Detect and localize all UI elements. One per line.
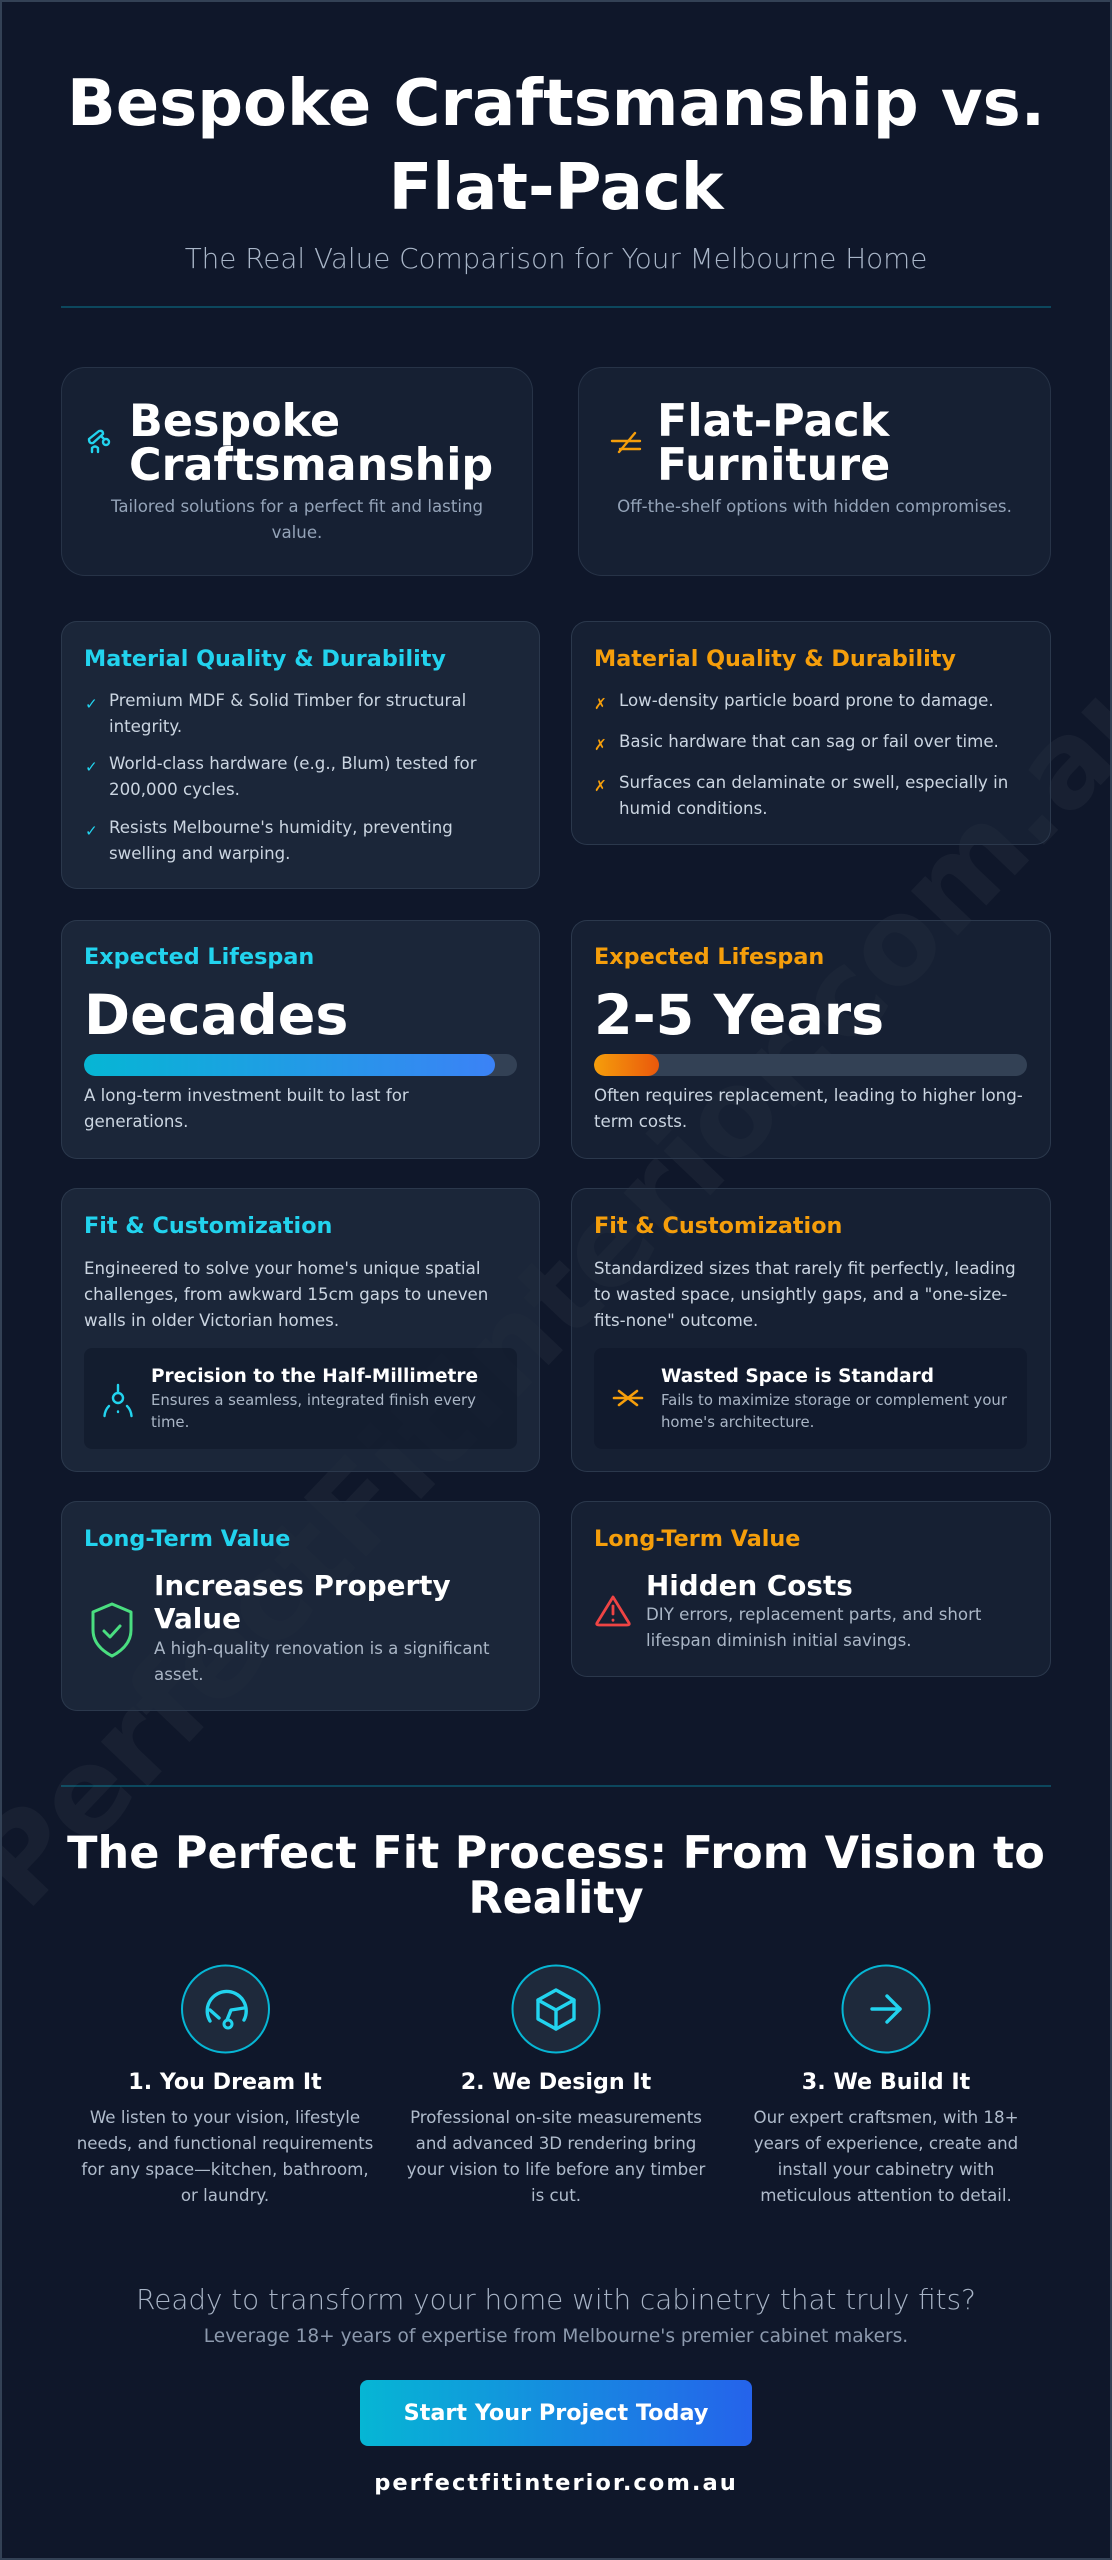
heading: Bespoke <box>129 396 340 447</box>
list item: ✓ <box>85 695 98 713</box>
list item: 200,000 cycles. <box>109 780 240 799</box>
description: Engineered to solve your home's unique spatial <box>84 1259 480 1278</box>
list item: ✓ <box>85 822 98 840</box>
value text <box>646 1605 981 1650</box>
subtitle: The Real Value Comparison for Your Melbourne Home <box>185 242 927 275</box>
heading: Expected Lifespan <box>594 944 824 970</box>
step 1 <box>77 1964 373 2205</box>
step text <box>77 2108 373 2205</box>
process heading: The Perfect Fit Process: From Vision to <box>67 1828 1045 1879</box>
heading: Long-Term Value <box>84 1526 290 1552</box>
value title: Value <box>154 1602 241 1635</box>
value text: lifespan diminish initial savings. <box>646 1631 912 1650</box>
list item: Low-density particle board prone to damage. <box>619 691 994 710</box>
panel: flat-pack material quality <box>571 621 1051 845</box>
metric: 2-5 Years <box>594 983 884 1048</box>
callout: precision <box>84 1348 517 1449</box>
description: challenges, from awkward 15cm gaps to uneven <box>84 1285 488 1304</box>
description: generations. <box>84 1112 188 1131</box>
value title: Hidden Costs <box>646 1569 853 1602</box>
step text <box>753 2108 1018 2205</box>
website: perfectfitinterior.com.au <box>374 2470 738 2496</box>
call to action heading: Ready to transform your home with cabinetry that truly fits? <box>136 2283 976 2316</box>
list item: ✗ <box>594 777 607 795</box>
title: Bespoke Craftsmanship vs. <box>67 67 1045 141</box>
panel: flat-pack long-term value <box>571 1501 1051 1677</box>
icon: not equal <box>610 432 642 454</box>
step text <box>407 2108 706 2205</box>
description: walls in older Victorian homes. <box>84 1311 339 1330</box>
panel: flat-pack header card <box>578 367 1051 576</box>
heading: Fit & Customization <box>84 1213 332 1239</box>
list item <box>85 754 477 799</box>
value text: asset. <box>154 1665 204 1684</box>
list item: Premium MDF & Solid Timber for structural <box>109 691 466 710</box>
callout text <box>151 1391 476 1431</box>
list item: humid conditions. <box>619 799 768 818</box>
list item: ✗ <box>594 736 607 754</box>
panel: bespoke material quality <box>61 621 540 889</box>
list item: Resists Melbourne's humidity, preventing <box>109 818 453 837</box>
button: Start Your Project Today <box>404 2400 708 2426</box>
call to action text: Leverage 18+ years of expertise from Melbourne's premier cabinet makers. <box>204 2326 908 2347</box>
step title: 2. We Design It <box>461 2069 651 2095</box>
step text: meticulous attention to detail. <box>760 2186 1012 2205</box>
icon: warning triangle <box>595 1596 631 1626</box>
list item: Surfaces can delaminate or swell, especially in <box>619 773 1008 792</box>
panel: bespoke fit <box>61 1188 540 1472</box>
description <box>594 1259 1016 1330</box>
callout: wasted space <box>594 1348 1027 1449</box>
step text: Our expert craftsmen, with 18+ <box>753 2108 1018 2127</box>
description: to wasted space, unsightly gaps, and a "one-size- <box>594 1285 1007 1304</box>
callout text: home's architecture. <box>661 1413 814 1431</box>
panel: bespoke lifespan <box>61 920 540 1159</box>
step text: years of experience, create and <box>754 2134 1018 2153</box>
list item: Basic hardware that can sag or fail over time. <box>619 732 999 751</box>
tagline <box>110 497 483 542</box>
step title: 1. You Dream It <box>128 2069 322 2095</box>
value title <box>154 1569 451 1635</box>
description: fits-none" outcome. <box>594 1311 758 1330</box>
progress bar 15% <box>594 1054 1027 1076</box>
icon: cube <box>512 1964 600 2054</box>
step text: We listen to your vision, lifestyle <box>90 2108 360 2127</box>
step 3 <box>753 1964 1018 2205</box>
tagline: value. <box>272 523 322 542</box>
list item: ✓ <box>85 758 98 776</box>
step text: is cut. <box>531 2186 581 2205</box>
heading: Material Quality & Durability <box>594 646 956 672</box>
progress bar 95% <box>84 1054 517 1076</box>
description: A long-term investment built to last for <box>84 1086 409 1105</box>
panel: bespoke header card <box>61 367 533 576</box>
callout text: Fails to maximize storage or complement your <box>661 1391 1007 1409</box>
value text: DIY errors, replacement parts, and short <box>646 1605 981 1624</box>
tagline: Tailored solutions for a perfect fit and lasting <box>111 497 483 516</box>
button <box>360 2380 752 2446</box>
callout text <box>661 1391 1007 1431</box>
process heading: Reality <box>468 1873 644 1924</box>
icon: wasted space mark <box>612 1390 644 1406</box>
step text: install your cabinetry with <box>778 2160 994 2179</box>
step text: for any space—kitchen, bathroom, <box>81 2160 369 2179</box>
icon: arrow <box>842 1964 930 2054</box>
description: Often requires replacement, leading to higher long- <box>594 1086 1023 1105</box>
value title: Increases Property <box>154 1569 451 1602</box>
description: Standardized sizes that rarely fit perfectly, leading <box>594 1259 1016 1278</box>
step text: your vision to life before any timber <box>407 2160 705 2179</box>
icon: craftsmanship tools <box>88 430 110 454</box>
heading: Craftsmanship <box>129 440 493 490</box>
step text: needs, and functional requirements <box>77 2134 373 2153</box>
list item: swelling and warping. <box>109 844 290 863</box>
callout title: Wasted Space is Standard <box>661 1366 934 1387</box>
heading: Material Quality & Durability <box>84 646 446 672</box>
metric: Decades <box>84 983 348 1048</box>
icon: compass <box>103 1384 133 1418</box>
step 2 <box>407 1964 706 2205</box>
panel: flat-pack fit <box>571 1188 1051 1472</box>
heading: Furniture <box>657 440 890 490</box>
panel: bespoke long-term value <box>61 1501 540 1711</box>
step text: and advanced 3D rendering bring <box>416 2134 696 2153</box>
tagline: Off-the-shelf options with hidden compromises. <box>617 497 1012 516</box>
heading: Expected Lifespan <box>84 944 314 970</box>
list item: integrity. <box>109 717 182 736</box>
title <box>67 67 1045 225</box>
list item <box>85 818 453 863</box>
list item: ✗ <box>594 695 607 713</box>
list item <box>85 691 466 736</box>
heading <box>657 396 890 490</box>
list item: World-class hardware (e.g., Blum) tested for <box>109 754 477 773</box>
description <box>84 1086 409 1131</box>
callout text: Ensures a seamless, integrated finish every <box>151 1391 476 1409</box>
step text: Professional on-site measurements <box>410 2108 702 2127</box>
icon: gauge <box>181 1964 270 2054</box>
step text: or laundry. <box>181 2186 269 2205</box>
panel: flat-pack lifespan <box>571 920 1051 1159</box>
description <box>84 1259 488 1330</box>
list item <box>594 773 1008 818</box>
step title: 3. We Build It <box>802 2069 970 2095</box>
callout text: time. <box>151 1413 189 1431</box>
value text: A high-quality renovation is a significant <box>154 1639 490 1658</box>
description: term costs. <box>594 1112 687 1131</box>
description <box>594 1086 1023 1131</box>
heading: Fit & Customization <box>594 1213 842 1239</box>
heading: Long-Term Value <box>594 1526 800 1552</box>
heading <box>129 396 493 490</box>
value text <box>154 1639 490 1684</box>
heading: Flat-Pack <box>657 396 889 447</box>
title: Flat-Pack <box>389 151 723 225</box>
process heading <box>67 1828 1045 1924</box>
icon: shield check <box>92 1602 132 1658</box>
callout title: Precision to the Half-Millimetre <box>151 1366 478 1387</box>
